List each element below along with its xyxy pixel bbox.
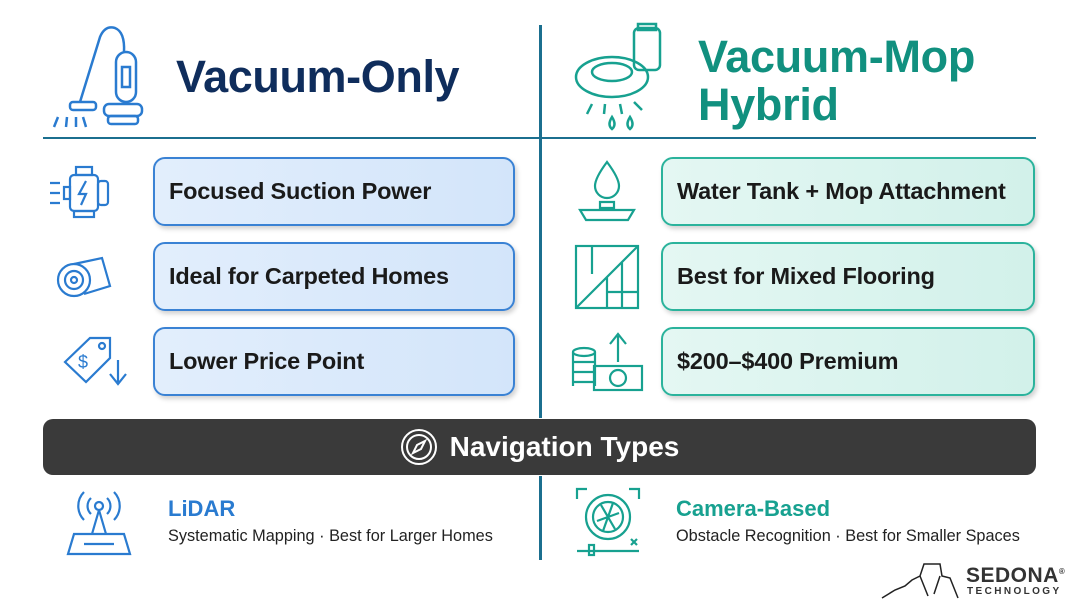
- icon: compass: [401, 429, 437, 465]
- text: Camera-Based: [676, 496, 1020, 545]
- icon: robot vacuum mop: [574, 22, 662, 131]
- box: Water Tank + Mop Attachment: Water Tank + Mop Attachment: [677, 178, 1006, 204]
- icon: motor: [50, 166, 110, 218]
- icon: mixed flooring: [574, 244, 640, 310]
- box: Lower Price Point: [153, 327, 515, 396]
- box: Ideal for Carpeted Homes: Ideal for Carpeted Homes: [169, 263, 449, 289]
- icon: water tank: [578, 160, 636, 222]
- title: Vacuum-Only: Vacuum-Only: [176, 51, 459, 102]
- title: Vacuum-Mop Hybrid: Vacuum-Mop: [698, 31, 975, 82]
- text: Camera-Based: Obstacle Recognition · Best for Smaller Spaces: [676, 527, 1020, 545]
- logo: Sedona Technology: [882, 563, 1065, 599]
- banner: Navigation Types: Navigation Types: [450, 431, 679, 462]
- title: Vacuum-Mop Hybrid: [698, 31, 975, 130]
- banner: Navigation Types: [43, 419, 1036, 475]
- logo: Sedona Technology: TECHNOLOGY: [967, 586, 1062, 597]
- icon: price tag down: $: [78, 352, 88, 372]
- icon: carpet roll: [56, 256, 112, 298]
- box: Best for Mixed Flooring: [661, 242, 1035, 311]
- text: LiDAR: LiDAR: [168, 496, 235, 521]
- icon: price tag down: [64, 336, 127, 386]
- icon: money premium: [572, 332, 644, 392]
- box: $200–$400 Premium: $200–$400 Premium: [677, 348, 898, 374]
- box: Focused Suction Power: Focused Suction Power: [169, 178, 431, 204]
- box: Lower Price Point: Lower Price Point: [169, 348, 364, 374]
- box: $200–$400 Premium: [661, 327, 1035, 396]
- box: Best for Mixed Flooring: Best for Mixed Flooring: [677, 263, 935, 289]
- horizontal divider: [43, 137, 1036, 139]
- icon: camera: [576, 488, 640, 556]
- box: Ideal for Carpeted Homes: [153, 242, 515, 311]
- text: Camera-Based: Camera-Based: [676, 496, 830, 521]
- icon: vacuum: [52, 26, 144, 128]
- icon: LiDAR: [66, 491, 132, 556]
- box: Focused Suction Power: [153, 157, 515, 226]
- vertical divider bottom: [539, 476, 542, 560]
- title: Vacuum-Mop Hybrid: Hybrid: [698, 79, 839, 130]
- vertical divider: [539, 25, 542, 418]
- text: LiDAR: Systematic Mapping · Best for Larger Homes: [168, 527, 493, 545]
- box: Water Tank + Mop Attachment: [661, 157, 1035, 226]
- text: LiDAR: [168, 496, 493, 545]
- logo: Sedona Technology: SEDONA®: [966, 564, 1065, 587]
